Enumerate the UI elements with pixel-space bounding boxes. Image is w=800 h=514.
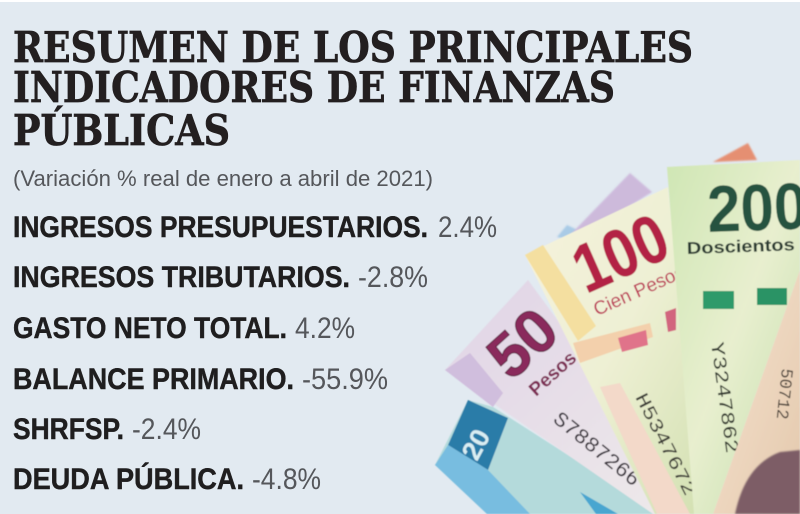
- indicator: ingresos tributarios: -2.8%: [358, 261, 428, 294]
- banknote: 200 pesos: Y3247862: [705, 341, 742, 455]
- indicator: deuda publica: -4.8%: [252, 463, 321, 496]
- indicator: balance primario: -55.9%: [302, 363, 388, 396]
- indicator list: [13, 211, 497, 496]
- banknote: 50 pesos: S7887266: [548, 409, 644, 493]
- banknote: 100 pesos: H5347672: [630, 390, 700, 500]
- banknote: 50 pesos: Pesos: [525, 348, 581, 401]
- banknote: 200 pesos: Doscientos: [686, 235, 795, 258]
- indicator: shrfsp: SHRFSP.: [13, 413, 124, 446]
- indicator: ingresos tributarios: INGRESOS TRIBUTARIOS.: [13, 261, 350, 294]
- banknote: 50 pesos: 50: [474, 295, 572, 392]
- indicator: shrfsp: -2.4%: [132, 413, 201, 446]
- banknote: 100 pesos: Cien Pesos: [590, 262, 688, 321]
- indicator: gasto neto total: GASTO NETO TOTAL.: [13, 312, 287, 345]
- back bills: orange, purple and blue corners: [557, 143, 757, 240]
- indicator: gasto neto total: 4.2%: [295, 312, 355, 345]
- banknote: right bill with portrait: [713, 270, 800, 514]
- banknote: right bill with portrait: 50712: [771, 367, 795, 420]
- banknote: 50 pesos: [445, 280, 700, 514]
- indicator: ingresos presupuestarios: 2.4%: [438, 211, 497, 244]
- banknote: 20 pesos: 20: [456, 424, 496, 465]
- indicator: deuda publica: DEUDA PÚBLICA.: [13, 462, 244, 496]
- title: INDICADORES DE FINANZAS: [13, 63, 615, 112]
- banknote: 20 pesos: [435, 400, 660, 514]
- indicator: shrfsp: [13, 413, 201, 446]
- indicator: balance primario: BALANCE PRIMARIO.: [13, 363, 294, 396]
- title: [13, 23, 693, 155]
- title: PÚBLICAS: [13, 105, 230, 155]
- banknote: 200 pesos: [667, 160, 800, 514]
- banknotes fan illustration: [435, 143, 800, 514]
- subtitle: (Variación % real de enero a abril de 2021): [13, 166, 433, 191]
- banknote: 100 pesos: 100: [561, 199, 680, 308]
- indicator: ingresos presupuestarios: INGRESOS PRESUPUESTARIOS.: [13, 211, 428, 244]
- title: RESUMEN DE LOS PRINCIPALES: [13, 23, 693, 72]
- banknote: 100 pesos: [525, 187, 700, 514]
